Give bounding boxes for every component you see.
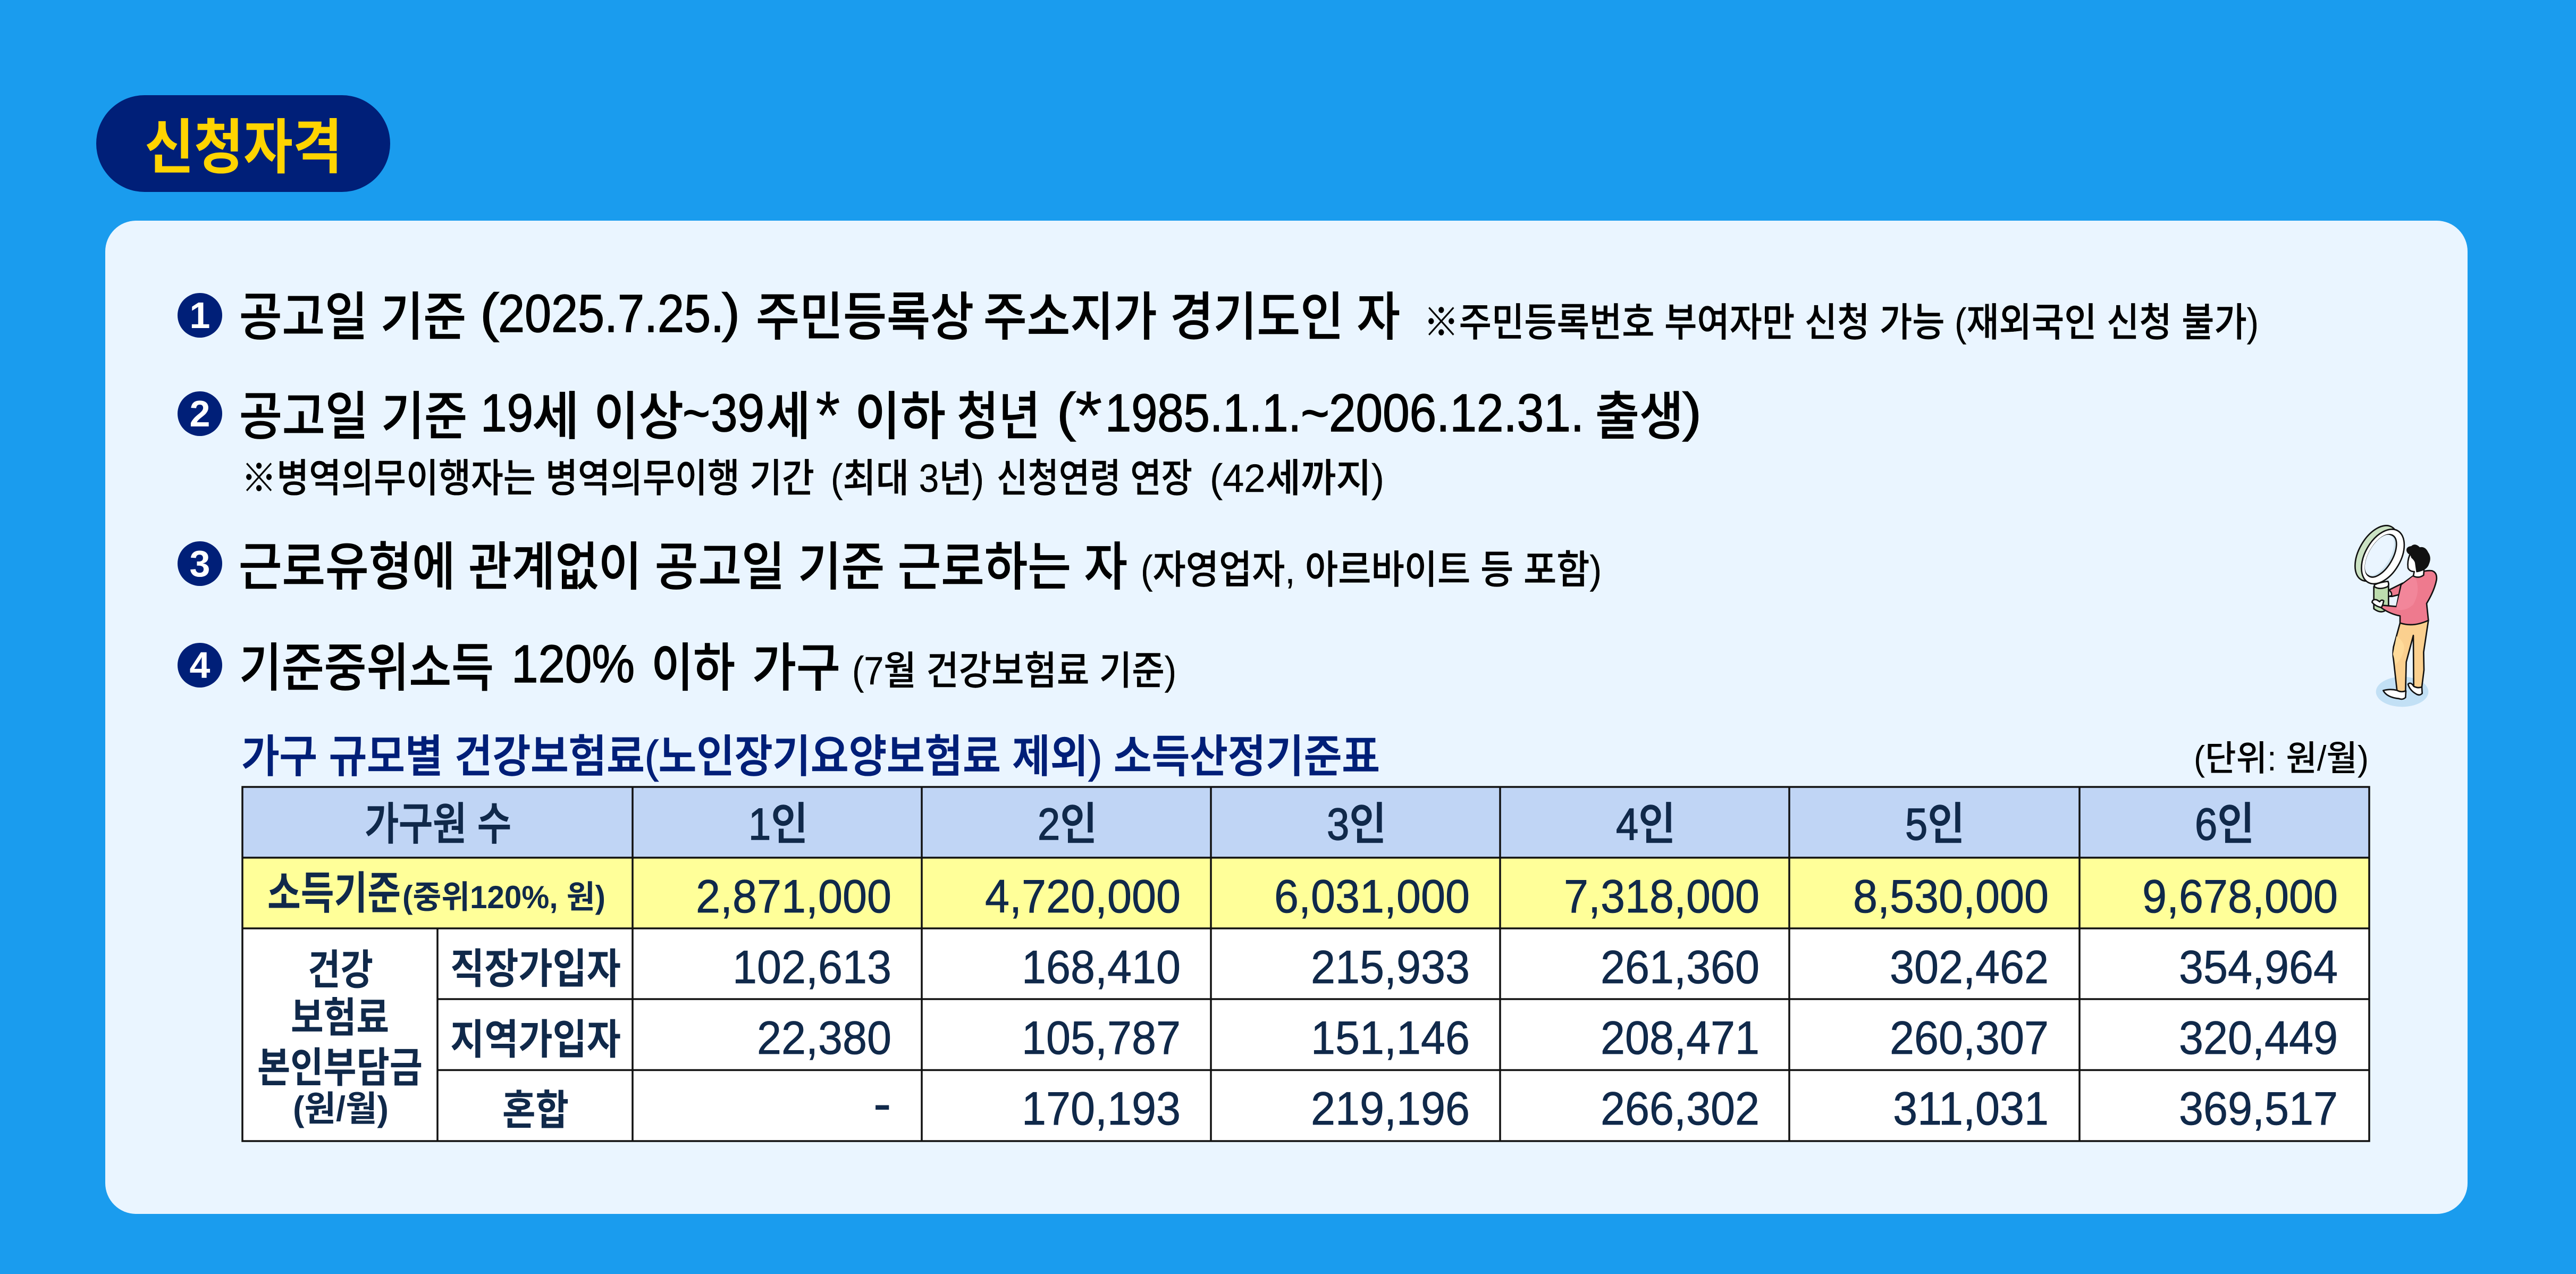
health insurance row label: 보험료 [291,994,389,1041]
income row: 4,720,000 [985,871,1181,923]
regional subscriber row [450,1012,2338,1065]
criterion 2 main text: 이상 [594,387,684,446]
criterion 2 main text: * [815,376,840,454]
employee subscriber row: 168,410 [1022,942,1181,994]
icon: number 2: 2 [190,393,210,434]
criterion 2 [178,376,1702,500]
income row: 2,871,000 [696,871,891,923]
icon: number 4: 4 [190,644,211,686]
header row: 2인 [1038,799,1097,849]
health insurance row label [257,946,423,1128]
regional subscriber row: 151,146 [1311,1012,1470,1065]
criterion 3 main text: 근로유형에 관계없이 공고일 기준 근로하는 자 [239,538,1127,596]
income row [267,868,2338,923]
criterion 1 main text: 주민등록상 [756,288,974,346]
employee subscriber row: 261,360 [1601,942,1760,994]
criterion 2 main text: ~ [683,383,710,443]
heading pill: 신청자격: 신청자격 [145,114,342,181]
icon: number 4 [178,643,222,688]
criterion 1 main text: 2025.7.25. [498,284,724,343]
income row: (중위120%, 원) [402,879,605,915]
criterion 2 main text: * [1075,376,1102,454]
criterion 4 main text [239,634,840,697]
health insurance row label: 본인부담금 [257,1044,423,1091]
unit note: (단위: 원/월) [2194,739,2369,778]
criterion 2 main text: 출생 [1595,387,1683,446]
icon: number 2 [178,391,222,436]
income row: 8,530,000 [1853,871,2049,923]
torso and arm [2381,571,2437,625]
criterion 4 main text: 가구 [752,639,840,697]
criterion 4 main text: 기준중위소득 [239,639,494,697]
legs [2393,621,2428,692]
mixed subscriber row: 혼합 [502,1087,569,1134]
back arm and hand [2388,583,2403,597]
header row: 5인 [1905,799,1965,849]
criterion 1 main text: 주소지가 경기도인 자 [983,288,1400,346]
criterion 1 [178,283,2259,346]
header row: 6인 [2195,799,2254,849]
income row: 9,678,000 [2142,871,2338,923]
criterion 2 note: 신청연령 연장 [997,456,1192,500]
icon: number 3: 3 [190,543,210,584]
criterion 2 main text: 19 [481,383,533,443]
criterion 2 note [241,456,1384,500]
employee subscriber row: 102,613 [733,942,891,994]
criterion 1 main text: 공고일 기준 [239,288,466,346]
head [2408,555,2424,577]
mixed subscriber row: 369,517 [2179,1083,2338,1135]
criterion 2 main text: ) [1682,382,1702,442]
regional subscriber row: 320,449 [2179,1012,2338,1065]
criterion 2 main text: 1985.1.1. [1105,383,1301,443]
criterion 2 main text: 청년 [957,387,1040,446]
employee subscriber row: 302,462 [1890,942,2049,994]
regional subscriber row: 지역가입자 [450,1016,621,1063]
criterion 2 main text: 공고일 기준 [239,387,467,446]
mixed subscriber row: 311,031 [1893,1083,2049,1135]
header row background [242,787,2369,858]
income row background [242,858,2369,928]
criterion 2 main text: 세 [766,387,811,446]
criterion 4 main text: 120% [511,634,635,694]
header row [365,799,2254,849]
criterion 1 main text: ) [722,283,740,342]
regional subscriber row: 105,787 [1022,1012,1181,1065]
criterion 2 main text: 39 [711,383,764,443]
mixed subscriber row [502,1070,2338,1136]
shoes [2383,690,2406,699]
heading pill: 신청자격 [96,95,390,192]
employee subscriber row: 직장가입자 [450,945,621,992]
mixed subscriber row: - [873,1070,891,1136]
health insurance row label: 건강 [308,946,373,993]
magnifier [2346,518,2413,612]
criterion 2 main text: 이하 [855,387,946,446]
table title: 가구 규모별 건강보험료(노인장기요양보험료 제외) 소득산정기준표 [241,732,1380,782]
icon: number 3 [178,541,222,586]
header row: 가구원 수 [365,799,511,849]
employee subscriber row: 215,933 [1311,942,1470,994]
employee subscriber row: 354,964 [2179,942,2338,994]
criterion 4 main text: 이하 [651,639,735,697]
criterion 2 main text: ( [1057,382,1076,442]
employee subscriber row [450,942,2338,994]
criterion 2 main text: ~ [1301,383,1329,443]
regional subscriber row: 22,380 [757,1012,891,1065]
income row: 소득기준 [267,868,401,918]
body background [242,928,2369,1141]
criterion 2 note: ※병역의무이행자는 병역의무이행 기간 [241,456,814,500]
panel: eligibility [105,221,2468,1214]
criterion 2 main text: 2006.12.31. [1329,383,1584,443]
mixed subscriber row: 170,193 [1022,1083,1181,1135]
illustration: person with magnifying glass [2346,518,2437,707]
criterion 3 [178,538,1602,596]
income row: 7,318,000 [1564,871,1760,923]
regional subscriber row: 208,471 [1601,1012,1760,1065]
criterion 4 [178,634,1176,697]
criterion 1 main text [239,283,1400,346]
criterion 2 main text [239,376,1702,454]
criterion 4 note: (7월 건강보험료 기준) [852,649,1176,693]
header row: 1인 [748,799,808,849]
criterion 2 main text: 세 [532,387,579,446]
criterion 1 main text: ( [480,283,499,342]
header row: 4인 [1616,799,1676,849]
icon: number 1 [178,293,222,338]
income table [242,787,2369,1141]
criterion 3 note: (자영업자, 아르바이트 등 포함) [1141,548,1602,592]
left hand [2372,600,2384,608]
criterion 2 note: (42세까지) [1210,456,1384,500]
regional subscriber row: 260,307 [1890,1012,2049,1065]
criterion 1 note: ※주민등록번호 부여자만 신청 가능 (재외국인 신청 불가) [1424,300,2259,345]
mixed subscriber row: 219,196 [1311,1083,1470,1135]
mixed subscriber row: 266,302 [1601,1083,1760,1135]
health insurance row label: (원/월) [293,1089,389,1128]
criterion 2 note: (최대 3년) [831,456,984,500]
header row: 3인 [1327,799,1386,849]
icon: number 1: 1 [190,295,210,336]
income row: 6,031,000 [1274,871,1470,923]
